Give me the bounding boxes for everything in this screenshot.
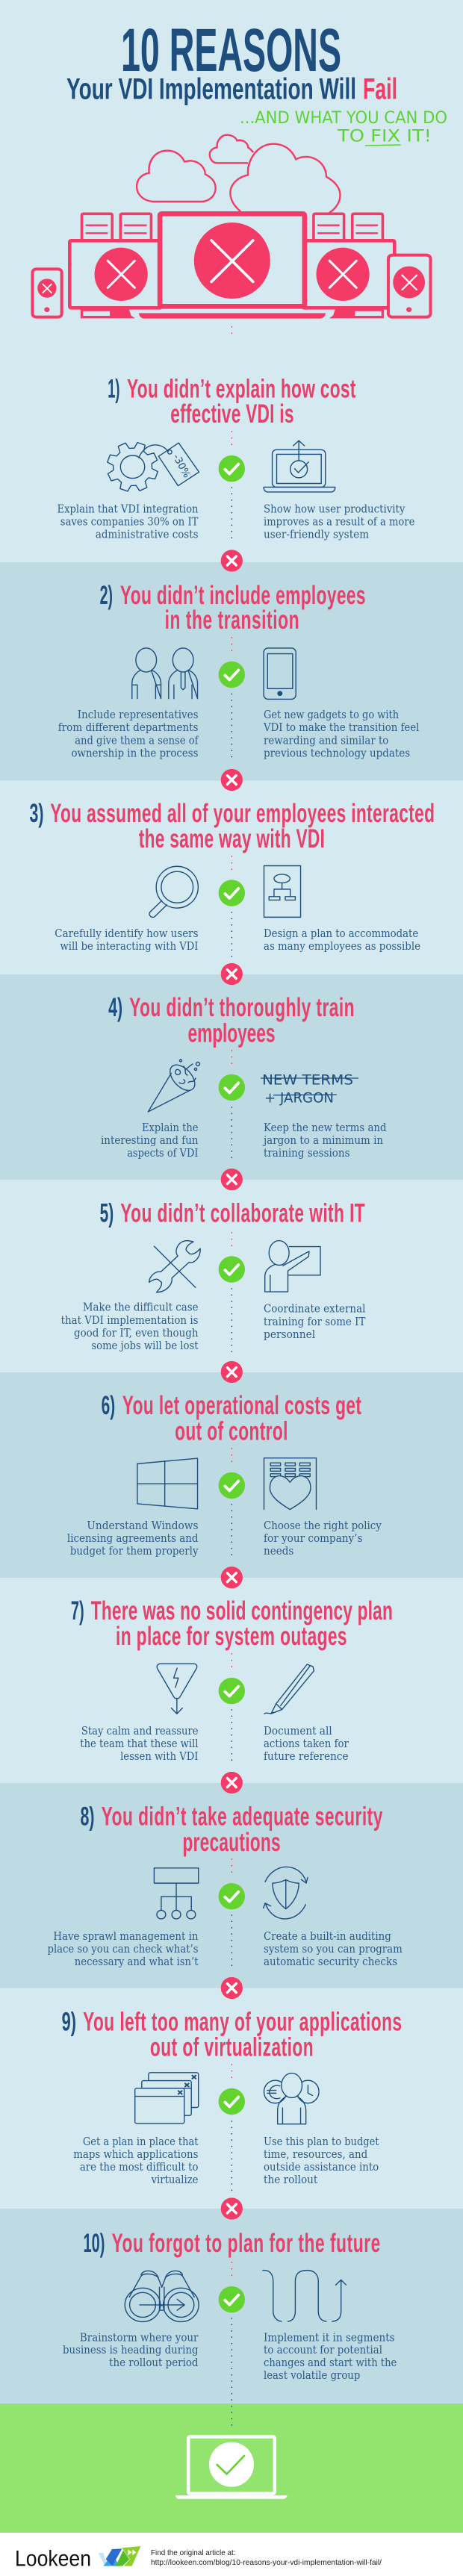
text: left advice (63, 2331, 199, 2369)
panel: reason 5 (0, 1169, 463, 1372)
heading: effective VDI is (170, 399, 293, 429)
text: left advice: from different departments (58, 721, 199, 734)
icon: stacked application windows (135, 2073, 199, 2124)
text: left advice: Get a plan in place that (83, 2135, 199, 2148)
icon: clouds (137, 135, 341, 213)
text: left advice: Carefully identify how users (55, 927, 199, 940)
heading: You left too many of your applications (83, 2008, 402, 2037)
heading: You assumed all of your employees interacted (50, 799, 435, 828)
icon: check (219, 662, 245, 688)
heading: You didn’t thoroughly train (129, 993, 354, 1022)
text: left advice (80, 1725, 199, 1763)
icon: trainer at board (265, 1241, 320, 1292)
heading: in the transition (165, 606, 299, 635)
text: right advice (264, 1930, 403, 1968)
text: right advice: Create a built-in auditing (264, 1930, 391, 1943)
heading: 1) (108, 375, 119, 404)
text: right advice (264, 927, 420, 953)
text: right advice (264, 1519, 382, 1558)
text: right advice: as many employees as possible (264, 940, 420, 953)
text: right advice: actions taken for (264, 1737, 349, 1750)
heading: 10) (84, 2229, 105, 2258)
icon: windows logo (137, 1458, 198, 1509)
text: left advice: good for IT, even though (74, 1327, 199, 1340)
text: left advice: the rollout period (109, 2356, 199, 2369)
icon: flow chart document (264, 865, 301, 917)
text: left advice: that VDI implementation is (61, 1314, 199, 1327)
text: left advice (57, 503, 199, 541)
heading: out of control (175, 1417, 288, 1446)
icon: centre laptop (139, 214, 326, 319)
text: right advice: Choose the right policy (264, 1519, 382, 1532)
text: left advice: virtualize (151, 2174, 199, 2186)
heading (81, 1802, 383, 1857)
heading (62, 2008, 402, 2062)
text: left advice: place so you can check what’s (48, 1943, 199, 1956)
text: left advice: Have sprawl management in (53, 1930, 199, 1943)
heading: You didn’t include employees (120, 581, 365, 610)
icon: check (219, 880, 245, 906)
icon: cross (221, 1772, 243, 1793)
text: right advice: rewarding and similar to (264, 735, 388, 747)
text: right advice: future reference (264, 1750, 349, 1763)
text: right advice: least volatile group (264, 2369, 360, 2382)
icon: check (219, 2088, 245, 2115)
text: left advice (61, 1301, 199, 1352)
heading: 7) (71, 1596, 84, 1625)
text: right advice: Design a plan to accommodate (264, 927, 418, 940)
text: left advice: budget for them properly (70, 1545, 199, 1558)
text: right advice: automatic security checks (264, 1956, 397, 1968)
text: left advice: some jobs will be lost (91, 1340, 199, 1352)
heading: You forgot to plan for the future (112, 2229, 380, 2258)
icon: magnifying glass (149, 866, 198, 917)
panel: reason 8 (0, 1772, 463, 1988)
icon: cross (221, 963, 243, 985)
panel: reason 1 (0, 343, 463, 562)
text: left advice (73, 2135, 199, 2186)
text: left advice: Explain that VDI integration (57, 503, 199, 515)
panel: reason 6 (0, 1361, 463, 1578)
text: right advice (264, 1725, 349, 1763)
icon: server files (82, 214, 382, 240)
text: left advice (67, 1519, 199, 1558)
icon: right phone (388, 255, 431, 317)
text: left advice (48, 1930, 199, 1968)
text: left advice: saves companies 30% on IT (60, 515, 199, 529)
icon: handwritten new terms and jargon: + JARGON (264, 1090, 334, 1107)
heading: You didn’t take adequate security (102, 1802, 383, 1832)
icon: two employees (132, 648, 198, 699)
icon: hierarchy (154, 1868, 199, 1919)
heading (71, 1596, 393, 1651)
text: left advice: Make the difficult case (83, 1301, 199, 1314)
text: right advice: changes and start with the (264, 2356, 397, 2369)
heading: precautions (182, 1828, 281, 1857)
icon: policy document with heart (264, 1458, 316, 1510)
text: right advice: the rollout (264, 2174, 317, 2186)
icon: laptop productivity (264, 441, 335, 492)
icon: pencil (264, 1664, 314, 1714)
text: left advice: and give them a sense of (75, 735, 199, 747)
icon: left phone (32, 269, 62, 317)
text: left advice: Include representatives (78, 709, 199, 721)
illustration: failing devices and clouds (32, 135, 431, 319)
heading: 5) (100, 1199, 114, 1228)
heading: 3) (30, 799, 43, 828)
panel: reason 2 (0, 550, 463, 781)
heading: You didn’t explain how cost (127, 375, 356, 404)
text: right advice: jargon to a minimum in (262, 1134, 384, 1147)
icon: check (219, 455, 245, 482)
source text (151, 2548, 382, 2567)
icon: check (219, 1472, 245, 1499)
panel: footer (0, 2533, 463, 2576)
icon: person with money and time (264, 2073, 319, 2124)
icon: monitor stands (82, 308, 382, 318)
text: right advice (264, 2135, 379, 2186)
text: right advice: user-friendly system (264, 529, 369, 541)
handwritten tagline (240, 109, 447, 146)
text: right advice: VDI to make the transition feel (263, 721, 420, 734)
text: right advice: Document all (264, 1725, 332, 1737)
heading (108, 993, 354, 1048)
icon: gear and discount tag: -30% (170, 452, 192, 480)
text: right advice (263, 709, 420, 760)
text: left advice: maps which applications (73, 2148, 199, 2161)
icon: cross (221, 1361, 243, 1383)
text: left advice (58, 709, 199, 760)
text: left advice: the team that these will (80, 1737, 199, 1750)
text: left advice: are the most difficult to (80, 2161, 199, 2174)
panel: reason 9 (0, 1977, 463, 2209)
icon: check (219, 1883, 245, 1909)
heading (102, 1391, 361, 1446)
heading: 4) (108, 993, 122, 1022)
icon: crossed out wrench (149, 1241, 200, 1292)
icon: cross (221, 344, 243, 367)
text: right advice (264, 1303, 366, 1341)
icon: success laptop (175, 2437, 287, 2499)
text: right advice: personnel (264, 1328, 315, 1341)
heading: You didn’t collaborate with IT (120, 1199, 365, 1228)
source text: Find the original article at: (151, 2548, 236, 2557)
text: right advice: Get new gadgets to go with (264, 709, 400, 721)
text: right advice: outside assistance into (264, 2161, 379, 2174)
subtitle: Fail (363, 72, 397, 105)
text: left advice: Understand Windows (87, 1519, 199, 1532)
heading (100, 581, 365, 635)
icon: cross (221, 2197, 243, 2220)
logo wordmark: Lookeen (15, 2546, 91, 2572)
handwritten tagline: TO FIX IT! (337, 127, 432, 146)
icon: gear and discount tag (100, 435, 199, 498)
text: right advice: Keep the new terms and (264, 1121, 387, 1134)
icon: right monitor (302, 240, 394, 308)
text: right advice: time, resources, and (264, 2148, 368, 2161)
text: left advice: lessen with VDI (120, 1750, 199, 1763)
icon: cross (221, 1977, 243, 1999)
text: right advice: Show how user productivity (264, 503, 405, 515)
icon: check (219, 2286, 245, 2312)
text: right advice: Use this plan to budget (264, 2135, 379, 2148)
panel: reason 3 (0, 769, 463, 975)
panel: green closing (0, 2404, 463, 2533)
icon: lightning warning triangle (157, 1664, 197, 1714)
heading: 2) (100, 581, 113, 610)
text: right advice: for your company’s (264, 1532, 363, 1545)
icon: shield with rotation arrows (264, 1867, 308, 1919)
text: left advice: business is heading during (63, 2344, 199, 2356)
heading: employees (188, 1019, 276, 1048)
text: left advice: interesting and fun (101, 1134, 199, 1147)
panel: hero (0, 0, 463, 367)
text: right advice: training for some IT (264, 1316, 366, 1328)
icon: check (219, 1074, 245, 1101)
icon: cross (221, 550, 243, 572)
text: left advice: aspects of VDI (127, 1147, 199, 1160)
icon: binoculars (125, 2271, 199, 2321)
heading (30, 799, 435, 853)
text: left advice: Brainstorm where your (80, 2331, 199, 2344)
source text: http://lookeen.com/blog/10-reasons-your-vdi-implementation-will-fail/ (151, 2558, 382, 2567)
heading: There was no solid contingency plan (91, 1596, 393, 1625)
text: left advice: will be interacting with VDI (60, 940, 199, 953)
icon: cross (221, 1169, 243, 1190)
heading: 8) (81, 1802, 94, 1831)
text: left advice: administrative costs (96, 529, 199, 541)
heading: 9) (62, 2008, 76, 2037)
text: left advice: Explain the (142, 1121, 199, 1134)
heading: in place for system outages (116, 1622, 347, 1651)
text: right advice: system so you can program (264, 1943, 403, 1956)
text: left advice: Stay calm and reassure (81, 1725, 199, 1737)
icon: cross (221, 769, 243, 791)
icon: check (219, 1678, 245, 1704)
heading: 6) (102, 1391, 115, 1420)
panel: reason 7 (0, 1567, 463, 1783)
icon: handwritten new terms and jargon: NEW TERMS (262, 1072, 353, 1089)
text: left advice (101, 1121, 199, 1160)
logo mark (99, 2546, 140, 2566)
text: left advice: ownership in the process (72, 747, 199, 760)
text: right advice: improves as a result of a more (264, 515, 415, 529)
icon: cross (221, 1567, 243, 1588)
panel: reason 10 (0, 2197, 463, 2404)
text: right advice (262, 1121, 387, 1160)
icon: left monitor (69, 240, 161, 308)
icon: tablet (264, 648, 296, 699)
text: left advice (55, 927, 199, 953)
text: right advice (264, 503, 415, 541)
text: left advice: licensing agreements and (67, 1532, 199, 1545)
text: right advice (264, 2331, 397, 2382)
text: right advice: Coordinate external (264, 1303, 366, 1316)
heading: You let operational costs get (122, 1391, 361, 1420)
heading: out of virtualization (150, 2033, 314, 2062)
text: right advice: to account for potential (264, 2344, 382, 2356)
heading (108, 375, 356, 429)
text: right advice: previous technology updates (264, 747, 410, 760)
icon: handwritten new terms and jargon (261, 1072, 358, 1107)
icon: confetti popper (148, 1060, 200, 1112)
text: right advice: Implement it in segments (264, 2331, 395, 2344)
panel: reason 4 (0, 963, 463, 1180)
heading: the same way with VDI (139, 824, 325, 853)
text: left advice: necessary and what isn’t (75, 1956, 199, 1968)
text: right advice: training sessions (264, 1147, 349, 1160)
icon: winding path arrow (263, 2271, 346, 2321)
handwritten tagline: ...AND WHAT YOU CAN DO (240, 109, 447, 128)
icon: check (219, 1256, 245, 1283)
text: right advice: needs (264, 1545, 293, 1558)
